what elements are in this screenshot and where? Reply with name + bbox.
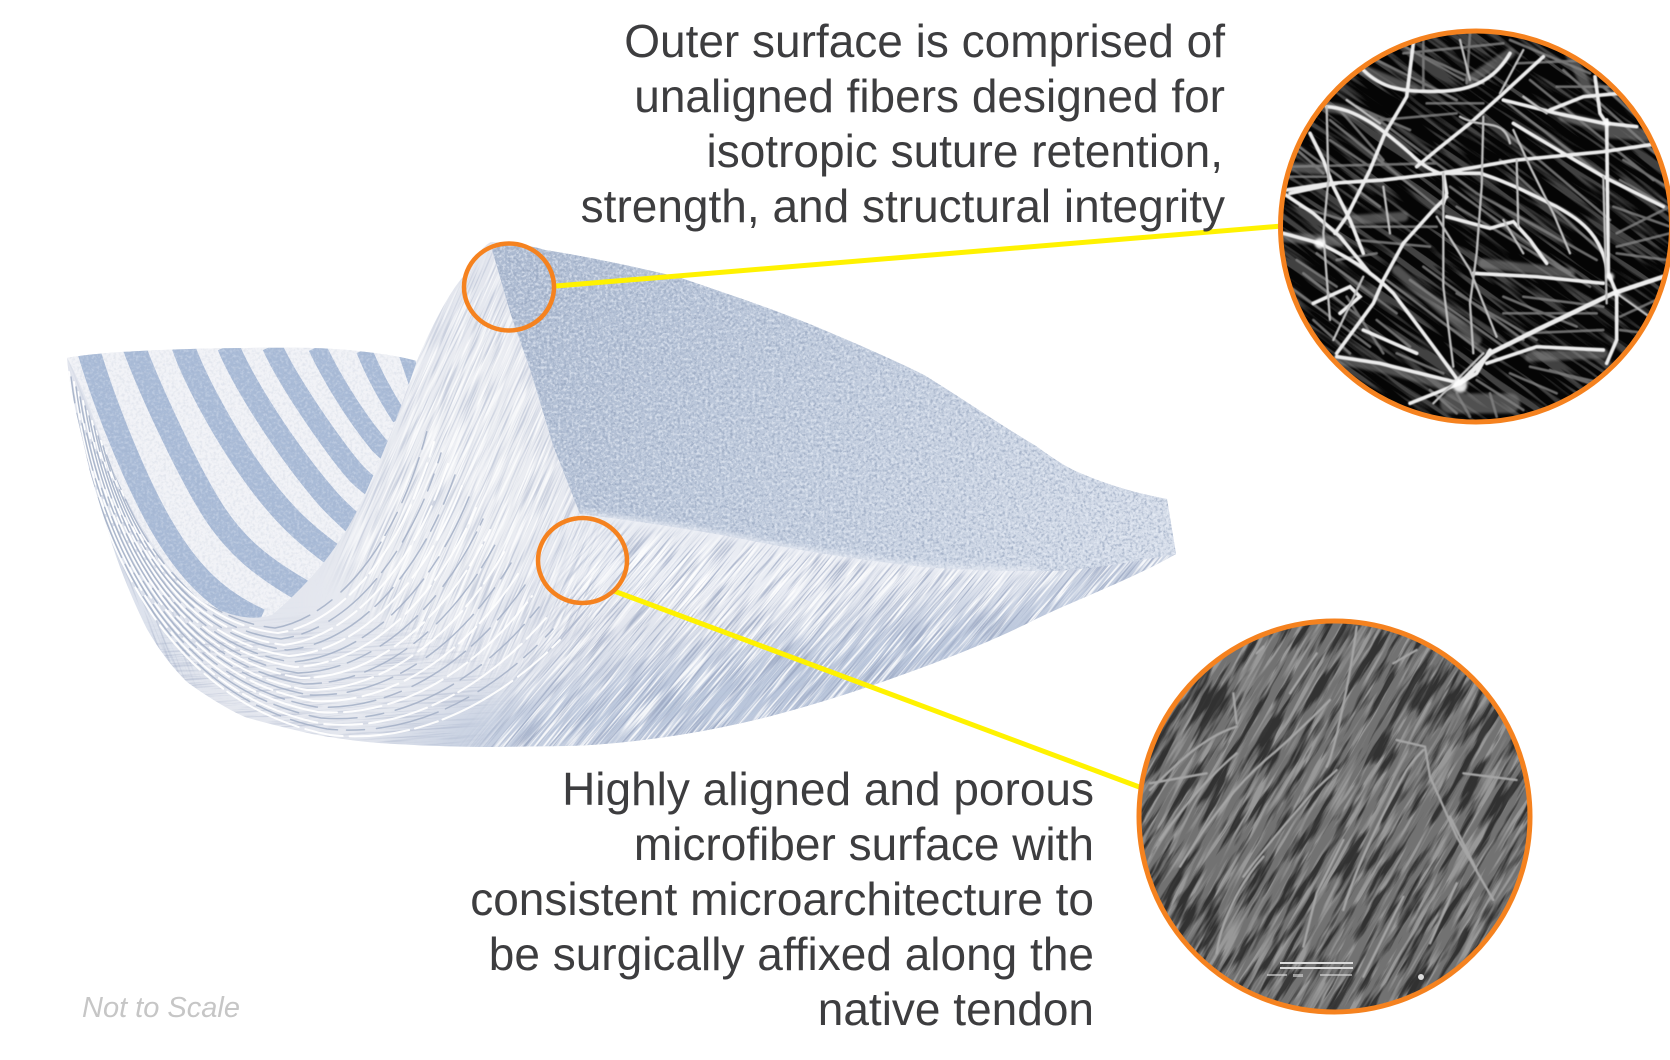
text block: outer surface description: isotropic suture retention,	[706, 125, 1223, 177]
orange callout ring on outer surface	[464, 244, 554, 330]
note: not to scale: Not to Scale	[82, 992, 240, 1024]
text block: outer surface description: unaligned fibers designed for	[634, 70, 1225, 122]
medium fibers	[1323, 40, 1663, 403]
text block: aligned surface description: consistent microarchitecture to	[470, 873, 1094, 925]
micrograph: aligned fibers with scale bar	[1130, 610, 1540, 1030]
broad grey fiber bands	[1280, 53, 1657, 403]
bright fibers	[1283, 43, 1663, 403]
bright junction spots	[1315, 120, 1620, 392]
inner striped surface	[67, 348, 417, 618]
light aligned strands	[1150, 627, 1517, 977]
text block: aligned surface description: native tendon	[818, 983, 1094, 1035]
yellow leader line to bottom micrograph	[614, 591, 1142, 788]
text block: outer surface description	[581, 15, 1225, 232]
inner smooth unaligned surface	[485, 235, 1185, 580]
fiber streaks on ridge	[450, 479, 451, 480]
faint parallel fibers	[1283, 33, 1670, 417]
text block: aligned surface description: be surgically affixed along the	[489, 928, 1094, 980]
scaffold front fibrous face	[60, 235, 1190, 760]
fiber streaks on left wall	[139, 520, 140, 521]
text block: aligned surface description: microfiber surface with	[634, 818, 1094, 870]
soft highlight along inner edge	[580, 514, 1036, 571]
orange callout ring on aligned surface	[538, 518, 627, 603]
text block: outer surface description: Outer surface is comprised of	[624, 15, 1225, 67]
text block: aligned surface description	[470, 763, 1094, 1035]
scale bar	[1267, 962, 1424, 980]
illustration: curved fiber scaffold	[60, 235, 1190, 760]
text block: aligned surface description: Highly aligned and porous	[562, 763, 1094, 815]
micrograph: unaligned fibers	[1275, 25, 1670, 430]
fiber strands sweeping around the curve	[69, 372, 560, 736]
text block: outer surface description: strength, and structural integrity	[581, 180, 1225, 232]
fiber streaks on the lower curve	[320, 680, 321, 681]
fiber streaks on lower right	[800, 639, 801, 641]
yellow leader line to top micrograph	[556, 226, 1282, 286]
